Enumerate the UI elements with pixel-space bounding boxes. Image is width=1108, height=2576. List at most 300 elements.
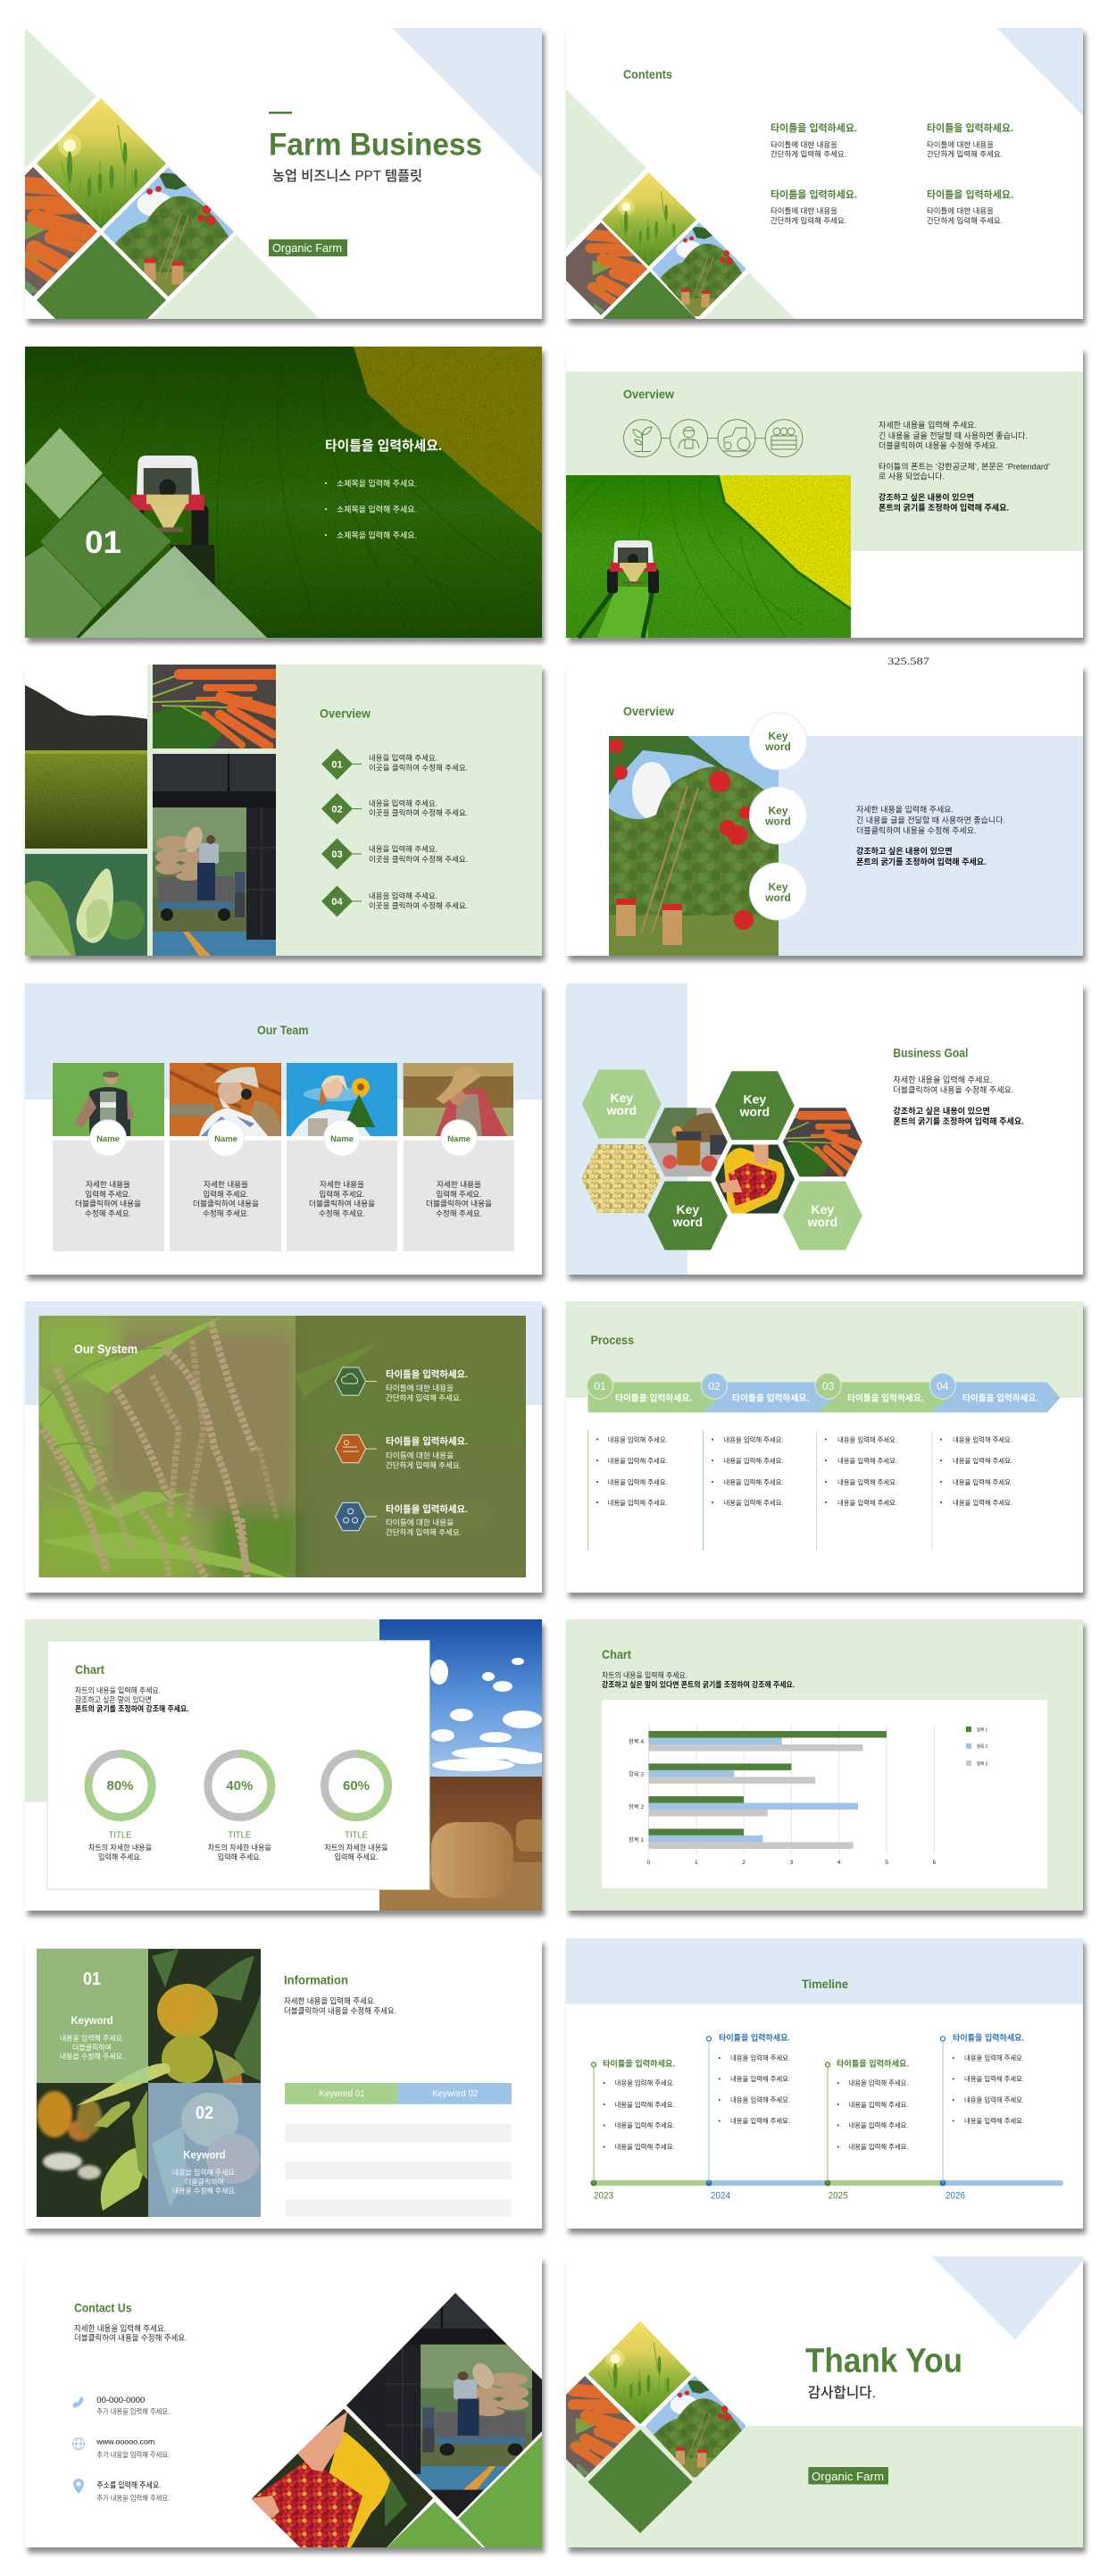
team card 1	[53, 1120, 164, 1251]
process step 03 arrow: 03	[822, 1380, 835, 1393]
contact: address: 주소를 입력해 주세요.	[96, 2480, 161, 2489]
description: 자세한 내용을 입력해 주세요.	[284, 1996, 376, 2006]
system item 1: 타이틀을 입력하세요.	[386, 1368, 468, 1380]
keyword circle 3	[750, 863, 807, 920]
system item 3	[336, 1502, 468, 1537]
hexagon photo: jam and apples	[647, 1108, 728, 1177]
hexagon keyword 2	[715, 1071, 795, 1140]
contents item 2	[927, 122, 1013, 159]
team card 2: 입력해 주세요.	[204, 1189, 248, 1199]
subtitle: 감사합니다.	[808, 2385, 876, 2401]
white chart card	[602, 1700, 1047, 1888]
title: Farm Business	[269, 127, 482, 163]
description: 차트의 내용을 입력해 주세요.	[602, 1670, 687, 1679]
heading: Our System: Our System	[74, 1342, 137, 1356]
list item 02: 02	[331, 804, 343, 815]
contents item 3: 타이틀을 입력하세요.	[771, 189, 857, 200]
overlay panel 01	[37, 1949, 148, 2083]
timeline 2026: 내용을 입력해 주세요.	[964, 2116, 1024, 2125]
process step 03 arrow	[815, 1373, 949, 1412]
translucent diamond	[25, 428, 103, 519]
list item 04	[321, 886, 468, 916]
description: 자세한 내용을 입력해 주세요.	[74, 2323, 166, 2333]
chart legend: 항목 1	[977, 1727, 987, 1733]
overlay panel 02	[148, 2083, 261, 2217]
table: Keyword 02	[432, 2089, 479, 2099]
slide 6: overview with apple orchard and keywords	[566, 665, 1083, 956]
body text: 긴 내용을 글을 전달할 때 사용하면 좋습니다.	[879, 431, 1028, 440]
contact: website: 추가 내용을 입력해 주세요.	[96, 2450, 170, 2459]
horizontal bar chart: 항목 4	[629, 1738, 645, 1745]
description: 강조하고 싶은 말이 있다면	[75, 1695, 152, 1704]
slide 12: bar chart	[566, 1619, 1083, 1911]
description	[75, 1686, 189, 1713]
timeline 2024: 내용을 입력해 주세요.	[730, 2095, 790, 2103]
timeline 2023: 2023	[594, 2190, 613, 2201]
process column 4	[932, 1431, 1012, 1551]
timeline 2023: 타이틀을 입력하세요.	[603, 2059, 675, 2069]
slide 7: our team	[25, 983, 542, 1275]
chart legend: 항목 3	[977, 1761, 987, 1767]
keyword circle 2	[750, 787, 807, 844]
horizontal bar chart	[629, 1724, 936, 1866]
team photos	[53, 1063, 513, 1136]
system item 1	[336, 1367, 468, 1402]
badge: Organic Farm	[808, 2467, 888, 2484]
process step 02 arrow: 타이틀을 입력하세요.	[732, 1392, 809, 1404]
team card 2	[170, 1120, 281, 1251]
horizontal bar chart: 1	[695, 1860, 698, 1866]
heading: Chart: Chart	[75, 1662, 104, 1677]
horizontal bar chart: 항목 1	[629, 1836, 645, 1844]
donut captions	[88, 1831, 388, 1861]
description: 차트의 내용을 입력해 주세요.	[75, 1686, 161, 1695]
hexagon keyword 1: Key	[610, 1091, 633, 1105]
team card 3: 자세한 내용을	[320, 1180, 364, 1189]
hexagon photo: soybeans	[580, 1143, 661, 1213]
keyword circle 1: word	[764, 740, 791, 753]
description: 더블클릭하여 내용을 수정해 주세요.	[284, 2006, 396, 2016]
contact: phone	[72, 2396, 170, 2415]
heading: Overview: Overview	[623, 387, 674, 401]
timeline 2025	[825, 2059, 909, 2201]
badge: Organic Farm: Organic Farm	[812, 2470, 884, 2483]
timeline 2024: 내용을 입력해 주세요.	[730, 2074, 790, 2083]
overlay panel 01: 내용을 입력해 주세요.	[60, 2034, 124, 2043]
contact: address: 추가 내용을 입력해 주세요.	[96, 2494, 170, 2503]
team card 4: 더블클릭하여 내용을	[426, 1198, 492, 1208]
contents item 4: 간단하게 입력해 주세요.	[927, 216, 1003, 225]
list item 03: 내용을 입력해 주세요.	[369, 845, 437, 854]
timeline 2025: 내용을 입력해 주세요.	[848, 2142, 909, 2151]
slide 16: thank you	[534, 2256, 1083, 2547]
hexagon keyword 3	[648, 1181, 728, 1250]
process step 01 arrow	[587, 1373, 720, 1412]
bullet list: 소제목을 입력해 주세요.	[337, 479, 417, 488]
horizontal bar chart: 0	[647, 1860, 651, 1866]
list item 03	[321, 838, 468, 870]
timeline 2024	[707, 2033, 790, 2201]
photo diamond: carrots	[25, 167, 97, 297]
timeline 2026: 타이틀을 입력하세요.	[953, 2033, 1024, 2043]
donut captions: TITLE	[109, 1831, 132, 1840]
process column 3: 내용을 입력해 주세요.	[837, 1498, 897, 1507]
heading: Information: Information	[284, 1972, 348, 1986]
body text: 더블클릭하여 내용을 수정해 주세요.	[879, 440, 998, 450]
chart legend	[966, 1727, 987, 1767]
slide 9: our system	[25, 1301, 542, 1593]
bullet list: 소제목을 입력해 주세요.	[337, 531, 417, 539]
heading: Contents: Contents	[623, 67, 672, 81]
team card 3	[287, 1120, 397, 1251]
team card 1: 자세한 내용을	[86, 1180, 130, 1189]
process step 01 arrow: 01	[594, 1380, 606, 1393]
process column 2: 내용을 입력해 주세요.	[723, 1456, 784, 1465]
contents item 3: 타이틀에 대한 내용을	[771, 206, 837, 215]
slide 14: timeline	[566, 1938, 1083, 2229]
heading: Business Goal: Business Goal	[893, 1046, 968, 1060]
system item 3: 간단하게 입력해 주세요.	[386, 1528, 462, 1537]
horizontal bar chart: 항목 2	[629, 1803, 645, 1811]
horizontal bar chart: 3	[790, 1860, 794, 1866]
heading: Overview: Overview	[320, 707, 371, 721]
contents item 1	[771, 122, 857, 159]
team card 3: 더블클릭하여 내용을	[309, 1198, 375, 1208]
keyword circle 1	[750, 713, 807, 770]
timeline 2024: 내용을 입력해 주세요.	[730, 2053, 790, 2062]
team card 4	[404, 1120, 514, 1251]
photo: lotus bud	[25, 854, 147, 956]
horizontal bar chart: 항목 3	[629, 1770, 645, 1777]
photo diamond: coffee cherries	[252, 2408, 433, 2547]
process column 4: 내용을 입력해 주세요.	[953, 1477, 1012, 1486]
contents item 1: 타이틀에 대한 내용을	[771, 140, 837, 149]
process column 1: 내용을 입력해 주세요.	[608, 1434, 668, 1443]
white chart card	[47, 1641, 429, 1889]
timeline 2025: 타이틀을 입력하세요.	[837, 2059, 909, 2069]
team card 2: 더블클릭하여 내용을	[193, 1198, 259, 1208]
body text: 폰트의 굵기를 조정하여 입력해 주세요.	[856, 857, 987, 866]
process column 2: 내용을 입력해 주세요.	[723, 1434, 784, 1443]
timeline 2025: 2025	[829, 2190, 848, 2201]
body text: 자세한 내용을 입력해 주세요.	[893, 1075, 992, 1084]
process step 04 arrow: 타이틀을 입력하세요.	[962, 1392, 1038, 1404]
list item 03: 이곳을 클릭하여 수정해 주세요.	[369, 855, 468, 864]
hexagon keyword 1	[582, 1070, 662, 1138]
donut captions: 차트의 자세한 내용을	[325, 1843, 388, 1852]
horizontal bar chart: 6	[932, 1860, 936, 1866]
photo diamonds	[554, 172, 746, 319]
team card 2: 수정해 주세요.	[203, 1209, 249, 1217]
contents item 1: 간단하게 입력해 주세요.	[771, 150, 846, 159]
timeline 2026: 내용을 입력해 주세요.	[964, 2095, 1024, 2103]
contents item 4: 타이틀을 입력하세요.	[927, 189, 1013, 200]
donut captions: 차트의 자세한 내용을	[208, 1843, 271, 1852]
body text: 폰트의 굵기를 조정하여 입력해 주세요.	[879, 503, 1009, 513]
hexagon keyword 4: word	[807, 1215, 837, 1229]
contents item 4	[927, 189, 1013, 225]
slide 4: overview with icons	[566, 347, 1083, 638]
heading: Our Team: Our Team	[257, 1023, 309, 1037]
process column 1: 내용을 입력해 주세요.	[608, 1498, 668, 1507]
horizontal bar chart: 2	[742, 1860, 746, 1866]
slide 11: donut charts	[25, 1619, 552, 1911]
overlay panel 02: Keyword	[184, 2149, 225, 2162]
process column 1	[587, 1431, 668, 1551]
body text: 더블클릭하여 내용을 수정해 주세요.	[893, 1085, 1013, 1095]
timeline 2025: 내용을 입력해 주세요.	[848, 2100, 909, 2109]
system item 2: 간단하게 입력해 주세요.	[386, 1460, 462, 1469]
team card 4: Name	[447, 1134, 471, 1144]
body text: 로 사용 되었습니다.	[879, 472, 945, 481]
contents item 1: 타이틀을 입력하세요.	[771, 122, 857, 134]
hexagon keyword 2: word	[739, 1105, 770, 1119]
process column 3: 내용을 입력해 주세요.	[837, 1434, 897, 1443]
overlay panel 01: 내용을 수정해 주세요.	[60, 2052, 124, 2061]
list item 02	[321, 793, 468, 824]
slide 13: information with citrus photo	[25, 1938, 542, 2229]
donut captions: TITLE	[345, 1831, 368, 1840]
horizontal bar chart: 5	[885, 1860, 888, 1866]
contents item 3: 간단하게 입력해 주세요.	[771, 216, 846, 225]
photo diamond: truck	[339, 2287, 545, 2523]
stray number label: 325.587	[887, 655, 929, 667]
process step 04 arrow: 04	[937, 1380, 949, 1393]
hexagon photo: carrots	[782, 1108, 862, 1177]
donut 40%	[208, 1754, 271, 1817]
table	[285, 2083, 512, 2217]
list item 04: 이곳을 클릭하여 수정해 주세요.	[369, 901, 468, 910]
photo: loading truck	[153, 754, 276, 956]
dark green diamond	[37, 235, 166, 319]
slide 15: contact us	[25, 2256, 545, 2576]
timeline bar	[591, 2179, 1063, 2187]
timeline 2026: 내용을 입력해 주세요.	[964, 2074, 1024, 2083]
tractor	[127, 456, 208, 548]
photo diamond: apple orchard	[104, 166, 234, 297]
overlay panel 01: 01	[83, 1970, 101, 1989]
team card 4: 입력해 주세요.	[436, 1189, 482, 1199]
process step 04 arrow	[929, 1373, 1060, 1412]
hexagon keyword 3: Key	[676, 1202, 699, 1217]
keyword circle 2: word	[764, 815, 791, 827]
photo diamond: wheat	[36, 98, 166, 229]
heading: Overview: Overview	[623, 704, 674, 718]
table: Keyword 01	[320, 2089, 365, 2099]
hexagon keyword 4: Key	[811, 1202, 834, 1217]
overlay panel 01: 더블클릭하여	[72, 2043, 112, 2052]
subtitle: 농업 비즈니스 PPT 템플릿	[272, 168, 422, 184]
process column 4: 내용을 입력해 주세요.	[953, 1434, 1012, 1443]
list item 02: 내용을 입력해 주세요.	[369, 799, 437, 807]
process step 03 arrow: 타이틀을 입력하세요.	[847, 1392, 924, 1404]
description: 폰트의 굵기를 조정하여 강조해 주세요.	[75, 1704, 189, 1713]
photo: rice field	[25, 665, 147, 849]
process step 02 arrow	[702, 1373, 834, 1412]
team card 1: 수정해 주세요.	[85, 1209, 131, 1217]
heading: Process: Process	[591, 1333, 634, 1347]
process column 3	[816, 1431, 897, 1551]
process step 01 arrow: 타이틀을 입력하세요.	[615, 1392, 692, 1404]
body text: 자세한 내용을 입력해 주세요.	[856, 805, 954, 815]
process column 2	[704, 1431, 784, 1551]
timeline 2023: 내용을 입력해 주세요.	[615, 2100, 675, 2109]
heading: Chart: Chart	[602, 1647, 631, 1661]
keyword circle 3: word	[764, 891, 791, 904]
contents item 2: 타이틀을 입력하세요.	[927, 122, 1013, 134]
process column 2: 내용을 입력해 주세요.	[723, 1477, 784, 1486]
body text: 긴 내용을 글을 전달할 때 사용하면 좋습니다.	[856, 815, 1005, 825]
team card 3: 수정해 주세요.	[319, 1209, 365, 1217]
list item 01: 내용을 입력해 주세요.	[369, 753, 437, 762]
hexagon keyword 1: word	[606, 1103, 637, 1117]
overlay panel 02: 내용을 수정해 주세요.	[172, 2187, 237, 2195]
team card 1: Name	[96, 1134, 120, 1144]
team card 1: 더블클릭하여 내용을	[75, 1198, 141, 1208]
donut captions: 입력해 주세요.	[334, 1853, 379, 1861]
heading: Timeline: Timeline	[802, 1977, 848, 1991]
contact: website: www.ooooo.com	[96, 2438, 154, 2446]
system item 3: 타이틀에 대한 내용을	[386, 1518, 454, 1527]
bullet list	[325, 479, 417, 539]
donut captions: 입력해 주세요.	[218, 1853, 262, 1861]
slide 5: overview numbered list	[25, 665, 542, 956]
description	[602, 1670, 795, 1689]
contents item 2: 간단하게 입력해 주세요.	[927, 150, 1003, 159]
number diamond 01	[40, 476, 171, 607]
team card 2: 자세한 내용을	[204, 1180, 248, 1189]
description	[284, 1996, 396, 2016]
body text: 자세한 내용을 입력해 주세요.	[879, 420, 977, 430]
timeline 2023: 내용을 입력해 주세요.	[615, 2078, 675, 2087]
description	[74, 2323, 187, 2343]
contents item 3	[771, 189, 857, 225]
icon row: plant, farmer, tractor, crate	[623, 420, 803, 457]
body text: 더블클릭하여 내용을 수정해 주세요.	[856, 825, 977, 835]
slide 10: process	[566, 1301, 1083, 1593]
body text: 강조하고 싶은 내용이 있으면	[893, 1106, 990, 1116]
horizontal bar chart: 4	[837, 1860, 841, 1866]
keyword circle 1: Key	[768, 730, 788, 742]
translucent lower shapes	[25, 546, 267, 638]
process column 1: 내용을 입력해 주세요.	[608, 1477, 668, 1486]
title: Thank You: Thank You	[805, 2342, 962, 2379]
donut captions: 차트의 자세한 내용을	[88, 1843, 152, 1852]
body text: 타이틀의 폰트는 ‘강한공군체’, 본문은 ‘Pretendard’	[879, 463, 1050, 472]
description: 더블클릭하여 내용을 수정해 주세요.	[74, 2333, 187, 2343]
list item 04: 내용을 입력해 주세요.	[369, 891, 437, 900]
donut 80%: 80%	[107, 1778, 134, 1794]
process step 02 arrow: 02	[708, 1380, 721, 1393]
process column 2: 내용을 입력해 주세요.	[723, 1498, 784, 1507]
chart legend: 항목 2	[977, 1744, 987, 1750]
contents item 4: 타이틀에 대한 내용을	[927, 206, 994, 215]
number diamond 01: 01	[85, 525, 121, 560]
slide 1: cover	[0, 28, 542, 319]
list item 01: 01	[331, 759, 343, 770]
system item 1: 간단하게 입력해 주세요.	[386, 1393, 462, 1402]
process column 3: 내용을 입력해 주세요.	[837, 1477, 897, 1486]
donut captions: TITLE	[228, 1831, 252, 1840]
list item 01	[321, 749, 468, 780]
system item 1: 타이틀에 대한 내용을	[386, 1384, 454, 1393]
body text	[893, 1075, 1024, 1126]
timeline 2023: 내용을 입력해 주세요.	[615, 2120, 675, 2129]
keyword circle 2: Key	[768, 804, 788, 816]
team card 3: 입력해 주세요.	[320, 1189, 364, 1199]
overlay panel 02: 02	[196, 2103, 213, 2123]
donut 40%: 40%	[226, 1778, 253, 1794]
timeline 2026: 2026	[946, 2190, 965, 2201]
title accent bar	[269, 112, 292, 114]
list item 03: 03	[331, 849, 343, 860]
team card 4: 자세한 내용을	[437, 1180, 481, 1189]
body text: 강조하고 싶은 내용이 있으면	[879, 492, 974, 502]
timeline 2024: 타이틀을 입력하세요.	[719, 2033, 790, 2043]
overlay panel 01: Keyword	[71, 2014, 112, 2027]
overlay panel 02: 내용을 입력해 주세요.	[172, 2168, 237, 2177]
slide 3: section divider with field photo	[25, 347, 542, 638]
system item 2	[336, 1434, 468, 1469]
timeline 2023: 내용을 입력해 주세요.	[615, 2142, 675, 2151]
process column 4: 내용을 입력해 주세요.	[953, 1498, 1012, 1507]
translucent overlay panel	[296, 1316, 526, 1577]
photo: rice panicles	[38, 1316, 527, 1581]
system item 2: 타이틀에 대한 내용을	[386, 1451, 454, 1459]
contact: phone: 추가 내용을 입력해 주세요.	[96, 2406, 170, 2415]
section title: 타이틀을 입력하세요.	[325, 439, 442, 454]
timeline 2026	[941, 2033, 1024, 2201]
donut captions: 입력해 주세요.	[98, 1853, 142, 1861]
slide 2: contents	[554, 28, 1083, 319]
process column 3: 내용을 입력해 주세요.	[837, 1456, 897, 1465]
hexagon photo: coffee cherries	[715, 1144, 796, 1214]
photo: tractor in field	[566, 475, 851, 638]
team card 4: 수정해 주세요.	[436, 1209, 482, 1217]
list item 01: 이곳을 클릭하여 수정해 주세요.	[369, 763, 468, 772]
timeline 2024: 내용을 입력해 주세요.	[730, 2116, 790, 2125]
list item 02: 이곳을 클릭하여 수정해 주세요.	[369, 808, 468, 817]
bullet list: 소제목을 입력해 주세요.	[337, 504, 417, 514]
body text: 폰트의 굵기를 조정하여 입력해 주세요.	[893, 1117, 1024, 1126]
team card 3: Name	[330, 1134, 354, 1144]
photo: oranges on branch	[37, 1949, 261, 2217]
badge: Organic Farm: Organic Farm	[272, 241, 342, 255]
hexagon keyword 4	[783, 1181, 862, 1250]
keyword circle 3: Key	[768, 881, 788, 893]
green accent shapes	[387, 2436, 542, 2547]
heading: Contact Us: Contact Us	[74, 2300, 132, 2314]
hexagon keyword 3: word	[672, 1215, 703, 1229]
contact: website	[73, 2438, 170, 2459]
body text	[879, 420, 1050, 513]
contact: phone: 00-000-0000	[96, 2396, 145, 2405]
timeline 2025: 내용을 입력해 주세요.	[848, 2078, 909, 2087]
process column 4: 내용을 입력해 주세요.	[953, 1456, 1012, 1465]
timeline 2026: 내용을 입력해 주세요.	[964, 2053, 1024, 2062]
photo: carrots	[140, 665, 282, 754]
timeline 2025: 내용을 입력해 주세요.	[848, 2120, 909, 2129]
description: 강조하고 싶은 말이 있다면 폰트의 굵기를 조정하여 강조해 주세요.	[602, 1680, 795, 1689]
donut 60%: 60%	[343, 1778, 370, 1794]
contact: address	[73, 2479, 170, 2503]
slide 8: business goal with hexagons	[566, 983, 1083, 1275]
timeline 2023	[591, 2059, 675, 2201]
contents item 2: 타이틀에 대한 내용을	[927, 140, 994, 149]
photo diamonds	[566, 2321, 746, 2533]
system item 2: 타이틀을 입력하세요.	[386, 1435, 468, 1447]
system item 3: 타이틀을 입력하세요.	[386, 1503, 468, 1515]
